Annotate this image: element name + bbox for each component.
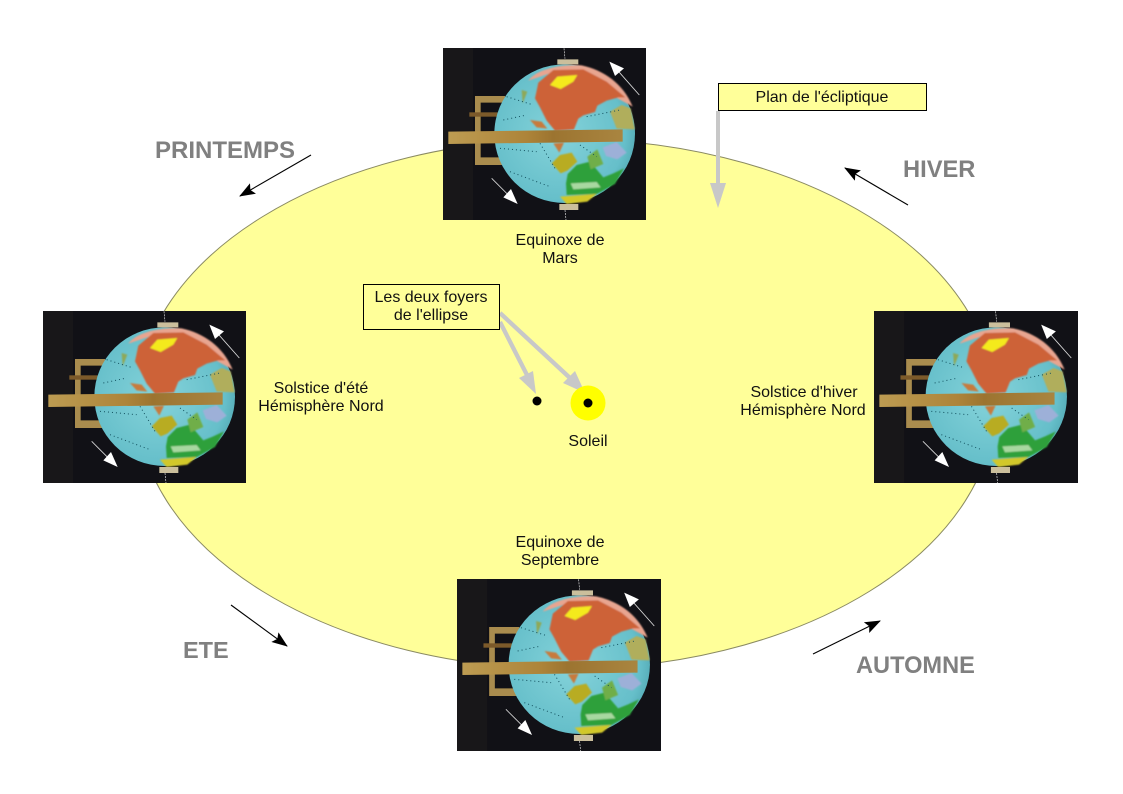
sun with focus dot — [570, 386, 606, 420]
callout: the two foci: de l'ellipse — [394, 307, 468, 324]
arrow: summer direction — [231, 605, 287, 646]
label: summer solstice: Solstice d'été — [274, 380, 368, 397]
season: spring: PRINTEMPS — [155, 137, 295, 164]
label: sun: Soleil — [568, 433, 608, 450]
arrow: autumn direction — [813, 621, 880, 654]
label: March equinox: Equinoxe de — [516, 232, 605, 249]
label: winter solstice: Solstice d'hiver — [750, 384, 858, 401]
arrow: spring direction — [240, 155, 311, 196]
label: September equinox: Equinoxe de — [516, 534, 605, 551]
arrow: ecliptic callout to plane — [710, 111, 726, 208]
arrows: callout to the two foci — [500, 313, 585, 394]
callout: the two foci: Les deux foyers — [375, 289, 487, 306]
label: ecliptic plane callout: Plan de l'écliptique — [756, 89, 889, 106]
label: ecliptic plane callout — [718, 84, 926, 110]
photo: globe at northern summer solstice — [43, 311, 246, 483]
label: summer solstice: Hémisphère Nord — [258, 398, 384, 415]
season: autumn: AUTOMNE — [856, 653, 975, 679]
photo: globe at northern winter solstice — [874, 311, 1078, 483]
ecliptic plane ellipse — [137, 139, 995, 669]
empty focus dot — [532, 396, 542, 406]
season: winter: HIVER — [903, 157, 975, 183]
label: winter solstice: Hémisphère Nord — [740, 402, 866, 419]
callout: the two foci — [364, 284, 500, 330]
label: September equinox: Septembre — [521, 552, 599, 569]
photo: globe at March equinox — [443, 48, 646, 220]
label: March equinox: Mars — [542, 250, 578, 267]
photo: globe at September equinox — [457, 579, 661, 751]
season: summer: ETE — [183, 637, 229, 663]
arrow: winter direction — [845, 168, 908, 205]
